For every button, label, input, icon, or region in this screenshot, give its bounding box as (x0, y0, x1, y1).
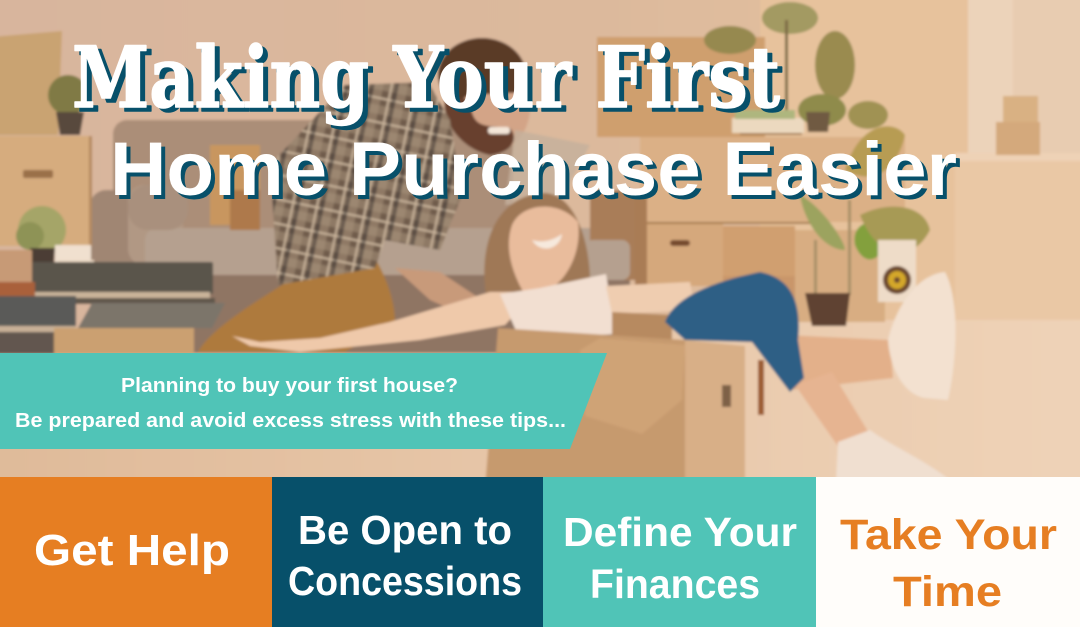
window recess (955, 0, 1080, 325)
left plant on box (48, 75, 88, 135)
cushion behind woman (505, 130, 590, 205)
intro banner (0, 353, 607, 449)
inside of box (612, 312, 672, 345)
man's far arm (397, 268, 476, 307)
tile: Take Your Time (816, 477, 1080, 627)
stacked moving boxes, back right (597, 37, 905, 322)
plants, back right (704, 2, 930, 326)
title line 2: Home Purchase Easier (110, 127, 957, 212)
tile: Be Open to Concessions: Be Open to (298, 507, 512, 553)
tile: Get Help (0, 477, 272, 627)
title line 2 shadow: Home Purchase Easier (114, 131, 961, 216)
woman's lower shoe (836, 430, 950, 480)
woman's top (500, 274, 616, 340)
man (198, 38, 530, 352)
sofa (90, 120, 640, 353)
title (72, 28, 961, 216)
tile: Define Your Finances: Finances (590, 561, 760, 607)
left cardboard box (0, 136, 92, 246)
woman's raised shoe (888, 272, 956, 400)
woman's near arm outstretched (232, 292, 535, 352)
tile: Take Your Time: Take Your (840, 511, 1057, 559)
woman's smile (532, 234, 562, 249)
man's face (462, 90, 530, 144)
title line 1 shadow: Making Your First (77, 32, 785, 131)
box flap (580, 338, 685, 434)
floor (0, 320, 1080, 477)
tile: Get Help: Get Help (34, 526, 230, 575)
woman's hair (484, 193, 590, 300)
photo background: couple playing with moving boxes (0, 0, 1080, 500)
cardboard box the woman sits in (485, 310, 766, 477)
woman (232, 193, 893, 452)
man's hair (436, 36, 525, 100)
small boxes on window sill (996, 96, 1040, 155)
stacked books and tables (0, 250, 225, 354)
man's pants (198, 262, 396, 352)
woman's far arm (606, 282, 695, 314)
tile: Be Open to Concessions: Concessions (288, 558, 522, 604)
title line 1: Making Your First (72, 28, 780, 127)
woman's far leg (785, 335, 893, 390)
woman's jeans (665, 272, 804, 392)
intro text line 2: Be prepared and avoid excess stress with these tips... (15, 410, 566, 432)
box front panel (485, 327, 686, 477)
plaid shirt (270, 82, 462, 285)
woman's near leg (798, 384, 868, 444)
tile: Be Open to Concessions (272, 477, 543, 627)
tile: Take Your Time: Time (893, 568, 1002, 616)
tile: Define Your Finances: Define Your (563, 509, 797, 555)
intro text line 1: Planning to buy your first house? (121, 375, 458, 397)
small plant and candles (14, 205, 96, 264)
back wall (0, 0, 762, 330)
left basket (0, 31, 62, 135)
box side panel (684, 339, 746, 477)
man's beard (444, 95, 514, 155)
speaker (878, 240, 916, 302)
tile: Define Your Finances (543, 477, 816, 627)
brick wall section (760, 0, 968, 330)
woman's face (509, 207, 579, 295)
